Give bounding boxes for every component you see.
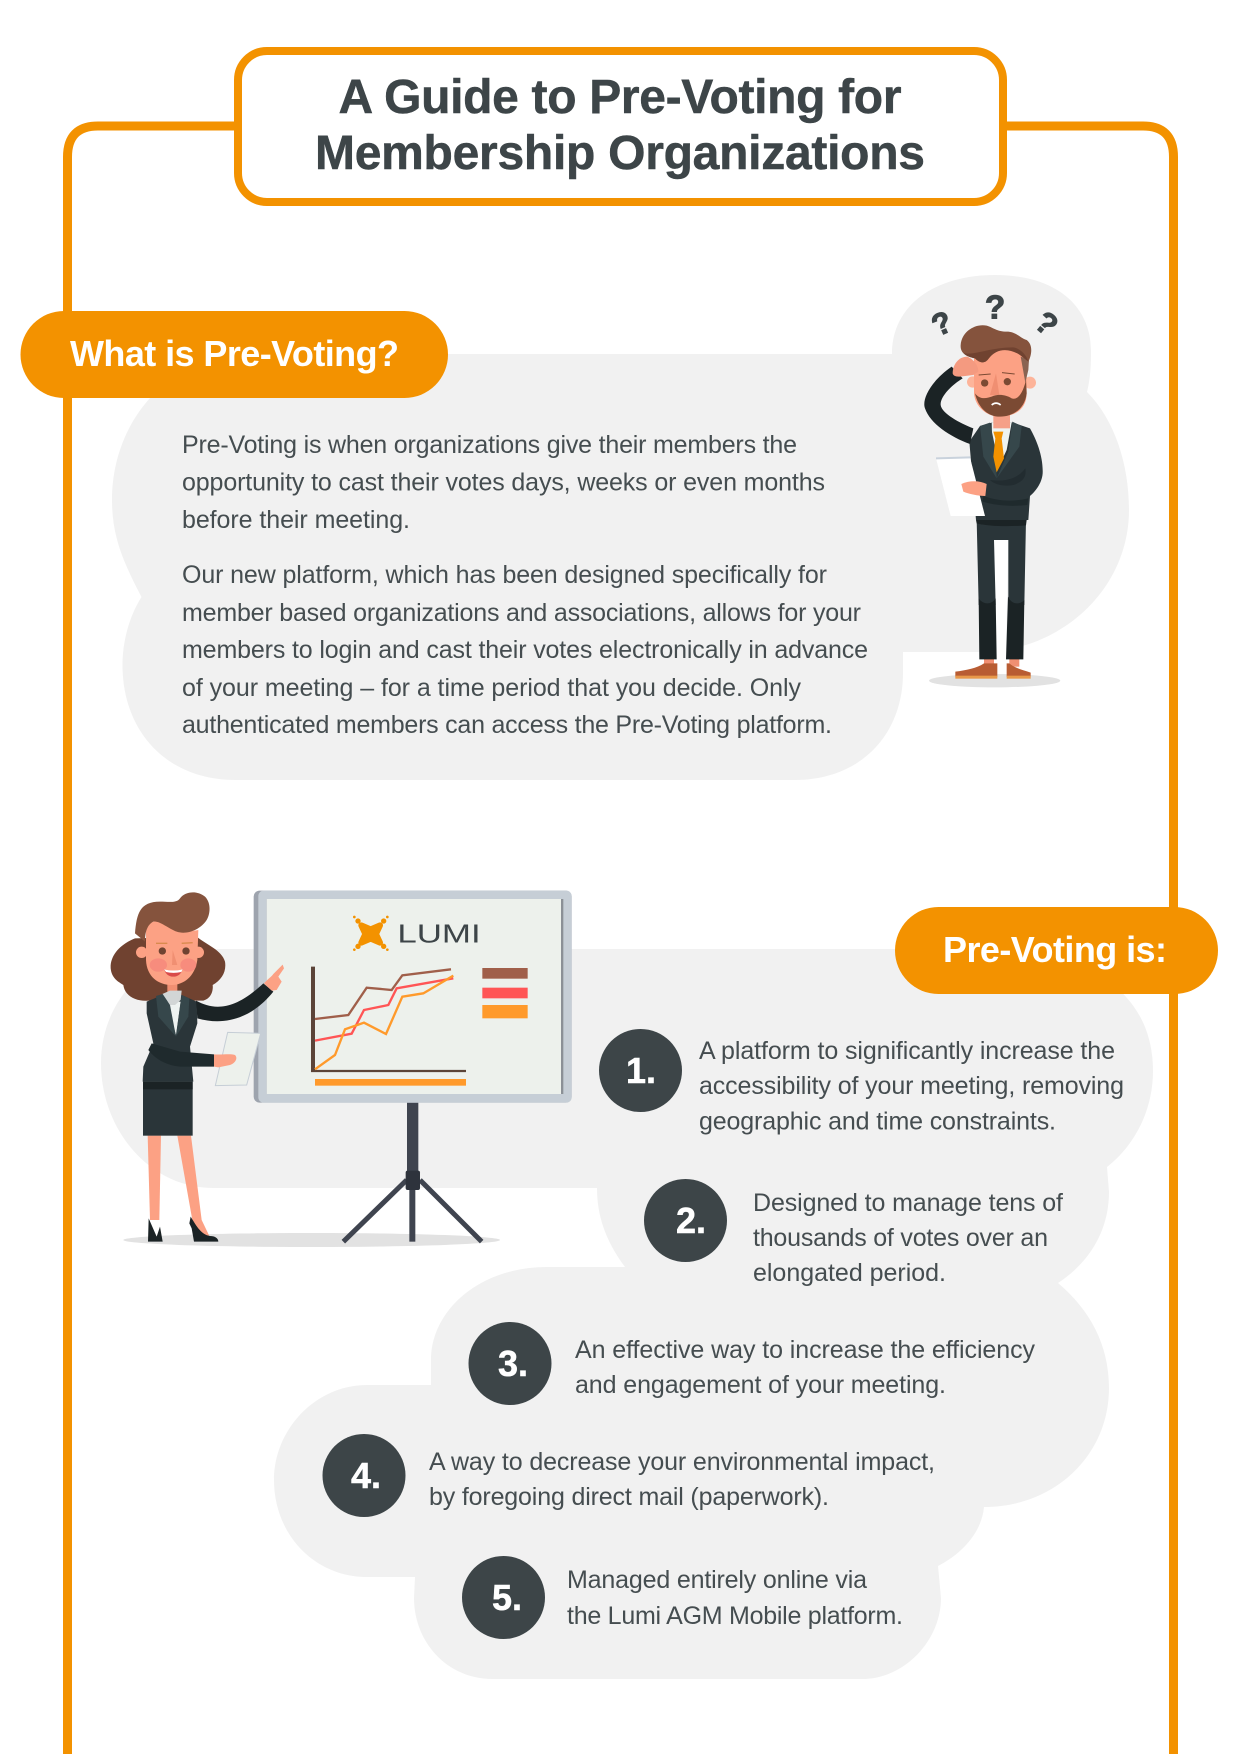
number badge 2: 2. (676, 1200, 706, 1241)
text block: platform paragraph: Our new platform, which has been designed specifically for (182, 561, 827, 589)
item 1 text (699, 1037, 1124, 1136)
presentation board (254, 891, 572, 1103)
board stand (343, 1103, 482, 1242)
list item 1 (599, 1029, 1124, 1136)
icon: presenter with chart board (111, 891, 572, 1247)
icon: confused man with clipboard: ? (985, 289, 1005, 326)
number badge 3: 3. (498, 1343, 528, 1384)
number badge 5 (462, 1556, 545, 1639)
item 2 text (753, 1189, 1063, 1287)
title: A Guide to Pre-Voting for (338, 71, 902, 124)
item 1 text: A platform to significantly increase the (699, 1037, 1115, 1065)
icon: confused man with clipboard (924, 289, 1064, 687)
section pill: pre-voting is (895, 907, 1218, 994)
item 1 text: geographic and time constraints. (699, 1108, 1056, 1136)
list item 4 (322, 1434, 935, 1517)
text block: platform paragraph: of your meeting – for a time period that you decide. Only (182, 674, 802, 702)
line chart (311, 967, 466, 1086)
number badge 1: 1. (626, 1050, 656, 1091)
item 5 text (567, 1566, 903, 1630)
item 3 text: and engagement of your meeting. (575, 1371, 946, 1399)
text block: definition paragraph: opportunity to cast their votes days, weeks or even months (182, 468, 825, 496)
item 1 text: accessibility of your meeting, removing (699, 1072, 1124, 1100)
number badge 1 (599, 1029, 682, 1112)
item 3 text: An effective way to increase the efficiency (575, 1336, 1036, 1364)
text block: definition paragraph (182, 431, 825, 534)
ground shadow (123, 1233, 500, 1247)
item 4 text: by foregoing direct mail (paperwork). (429, 1483, 829, 1511)
text block: platform paragraph (182, 561, 868, 739)
list item 2 (644, 1179, 1063, 1287)
number badge 5: 5. (492, 1577, 522, 1618)
icon: lumi logo (353, 916, 481, 951)
chart legend (482, 968, 528, 1018)
panel: what is pre-voting (20, 275, 1129, 780)
number badge 4: 4. (351, 1455, 381, 1496)
text block: platform paragraph: members to login and cast their votes electronically in advance (182, 636, 868, 664)
number badge 2 (644, 1179, 727, 1262)
text block: platform paragraph: member based organizations and associations, allows for your (182, 599, 861, 627)
panel background blob (112, 275, 1129, 780)
item 3 text (575, 1336, 1036, 1399)
panel: pre-voting is (101, 891, 1218, 1679)
list item 5 (462, 1556, 903, 1639)
number badge 4 (322, 1434, 406, 1517)
title (315, 71, 925, 180)
text block: definition paragraph: before their meeting. (182, 506, 410, 534)
icon: lumi logo: LUMI (397, 918, 481, 948)
item 4 text: A way to decrease your environmental impact, (429, 1448, 935, 1476)
item 2 text: elongated period. (753, 1259, 946, 1287)
title: Membership Organizations (315, 127, 925, 180)
section pill: what is pre-voting (20, 311, 448, 398)
icon: confused man with clipboard: ? (926, 305, 957, 343)
item 2 text: Designed to manage tens of (753, 1189, 1063, 1217)
title box (238, 51, 1003, 202)
woman presenter (111, 892, 284, 1242)
section pill: what is pre-voting: What is Pre-Voting? (70, 333, 399, 374)
item 2 text: thousands of votes over an (753, 1224, 1048, 1252)
item 4 text (429, 1448, 935, 1511)
text block: definition paragraph: Pre-Voting is when organizations give their members the (182, 431, 797, 459)
icon: confused man with clipboard: ? (1028, 305, 1064, 343)
list item 3 (468, 1322, 1036, 1405)
number badge 3 (468, 1322, 552, 1405)
panel background blob (101, 949, 1153, 1679)
item 5 text: the Lumi AGM Mobile platform. (567, 1602, 903, 1630)
section pill: pre-voting is: Pre-Voting is: (943, 929, 1167, 970)
text block: platform paragraph: authenticated members can access the Pre-Voting platform. (182, 711, 832, 739)
item 5 text: Managed entirely online via (567, 1566, 867, 1594)
